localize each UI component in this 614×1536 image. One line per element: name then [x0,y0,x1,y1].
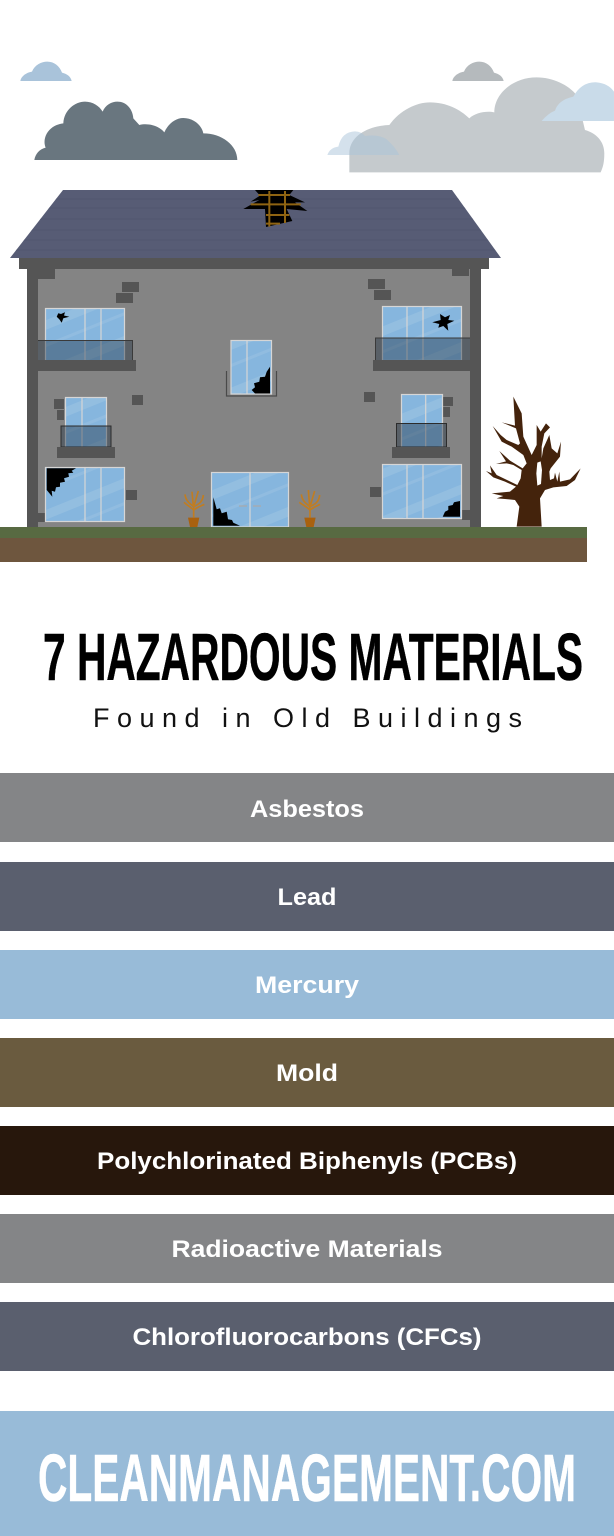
window: upper left with balcony [38,308,136,371]
list item: Radioactive Materials: Radioactive Materials [172,1236,442,1263]
door: glass double door, broken corner [212,472,288,527]
cloud: small grey top right [452,62,504,81]
window: lower left, broken corner [46,468,124,522]
cloud: large light grey [349,77,604,172]
exposed bricks [38,269,470,522]
cloud: pale blue right [542,82,614,121]
list item: Mercury: Mercury [255,972,360,999]
eave [19,258,489,269]
list item: Chlorofluorocarbons (CFCs): Chlorofluorocarbons (CFCs) [132,1324,482,1351]
left pillar [27,269,38,527]
list item: Lead: Lead [278,884,336,911]
right pillar [470,269,481,527]
list item: Radioactive Materials [0,1214,614,1283]
list item: Polychlorinated Biphenyls (PCBs) [0,1126,614,1195]
list item: Lead [0,862,614,931]
dead tree [486,397,581,527]
wall [27,269,481,527]
plant pot left [184,491,204,527]
cloud: translucent blue over large cloud [327,131,399,155]
window: middle right with balcony [392,394,450,458]
roof hole with exposed beams [243,190,307,227]
window: middle left with balcony [57,398,115,458]
building [0,190,510,527]
cloud: dark grey [34,102,237,160]
roof [0,190,510,258]
window: lower right, broken corner [382,464,462,518]
plant pot right [299,490,320,527]
ground: grass [0,527,587,538]
list item: Mold [0,1038,614,1107]
list item: Asbestos [0,773,614,842]
cloud: small blue top left [20,62,72,81]
ground: soil [0,538,587,562]
list item: Chlorofluorocarbons (CFCs) [0,1302,614,1371]
window: upper right with balcony [373,306,470,371]
list item: Mercury [0,950,614,1019]
list item: Mold: Mold [276,1060,338,1087]
footer band with website [0,1411,614,1536]
subtitle: Found in Old Buildings [93,703,522,733]
list item: Asbestos: Asbestos [250,796,364,823]
window: upper centre with rail [226,340,276,396]
list item: Polychlorinated Biphenyls (PCBs): Polychlorinated Biphenyls (PCBs) [97,1148,517,1175]
